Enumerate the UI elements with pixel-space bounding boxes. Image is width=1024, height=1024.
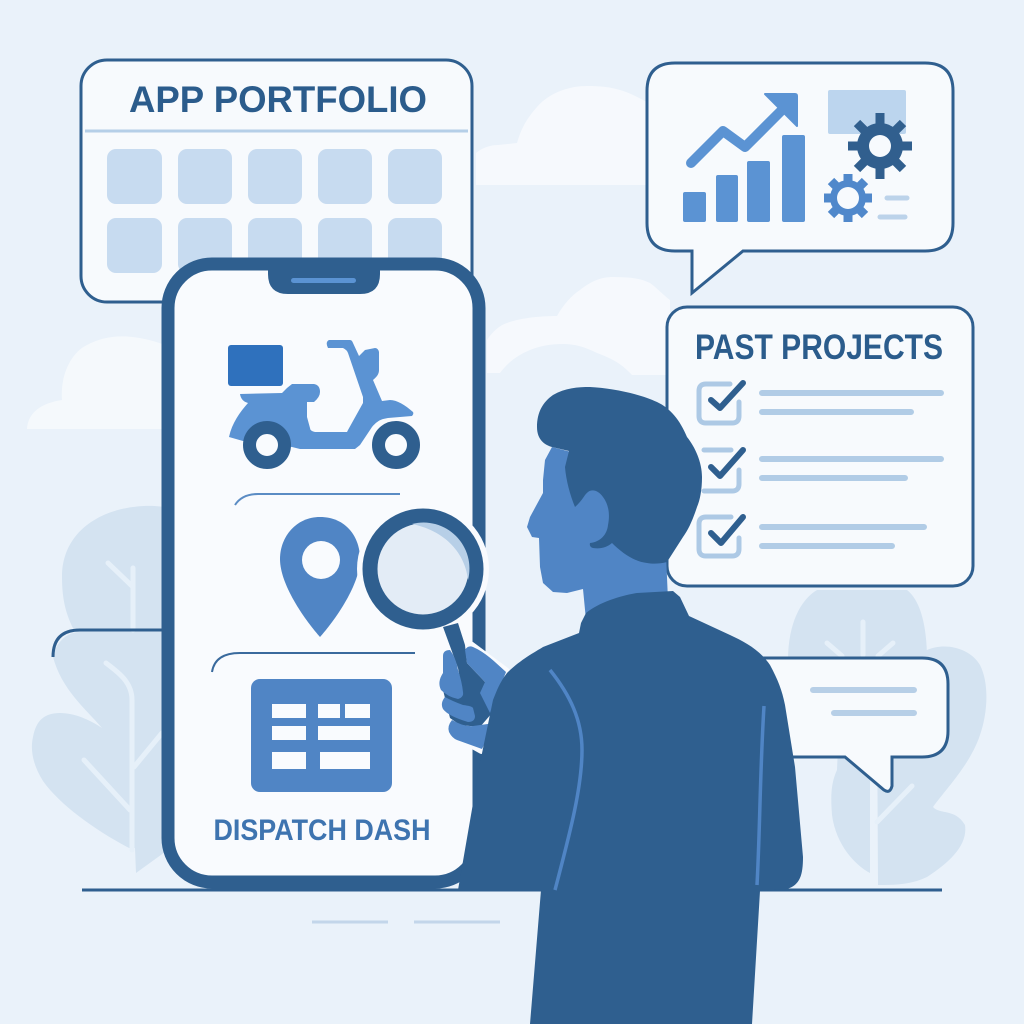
icon: dispatch dashboard (251, 679, 392, 792)
panel: lower speech bubble (760, 658, 948, 791)
checklist (699, 383, 941, 556)
person (458, 387, 803, 1024)
cloud left (27, 336, 165, 429)
tree right (788, 590, 986, 885)
icon: small gear (824, 174, 872, 222)
cloud top centre (476, 86, 650, 185)
icon: hand holding magnifying glass (357, 503, 506, 749)
body (458, 591, 803, 1024)
icon: delivery scooter (228, 340, 414, 462)
ground dashes (312, 920, 500, 924)
heading: app portfolio: APP PORTFOLIO (129, 79, 427, 120)
panel: past projects (667, 307, 973, 586)
small panel (828, 90, 906, 134)
app tiles (107, 149, 442, 273)
icon: large gear (848, 113, 912, 179)
trend arrow (691, 94, 797, 163)
face and neck (527, 447, 668, 620)
notch (268, 266, 380, 294)
phone (168, 264, 479, 882)
ground line (82, 888, 942, 892)
body highlight lines (550, 670, 582, 890)
label: dispatch dash: DISPATCH DASH (214, 814, 430, 847)
left outline card behind phone (53, 630, 165, 657)
bar chart (683, 135, 805, 222)
panel: analytics speech bubble (647, 63, 953, 293)
cloud mid (487, 277, 670, 375)
hair (537, 387, 702, 564)
icon: location pin (280, 517, 360, 637)
heading: past projects: PAST PROJECTS (695, 328, 943, 367)
tree left (32, 506, 165, 873)
panel: app portfolio (81, 60, 472, 302)
